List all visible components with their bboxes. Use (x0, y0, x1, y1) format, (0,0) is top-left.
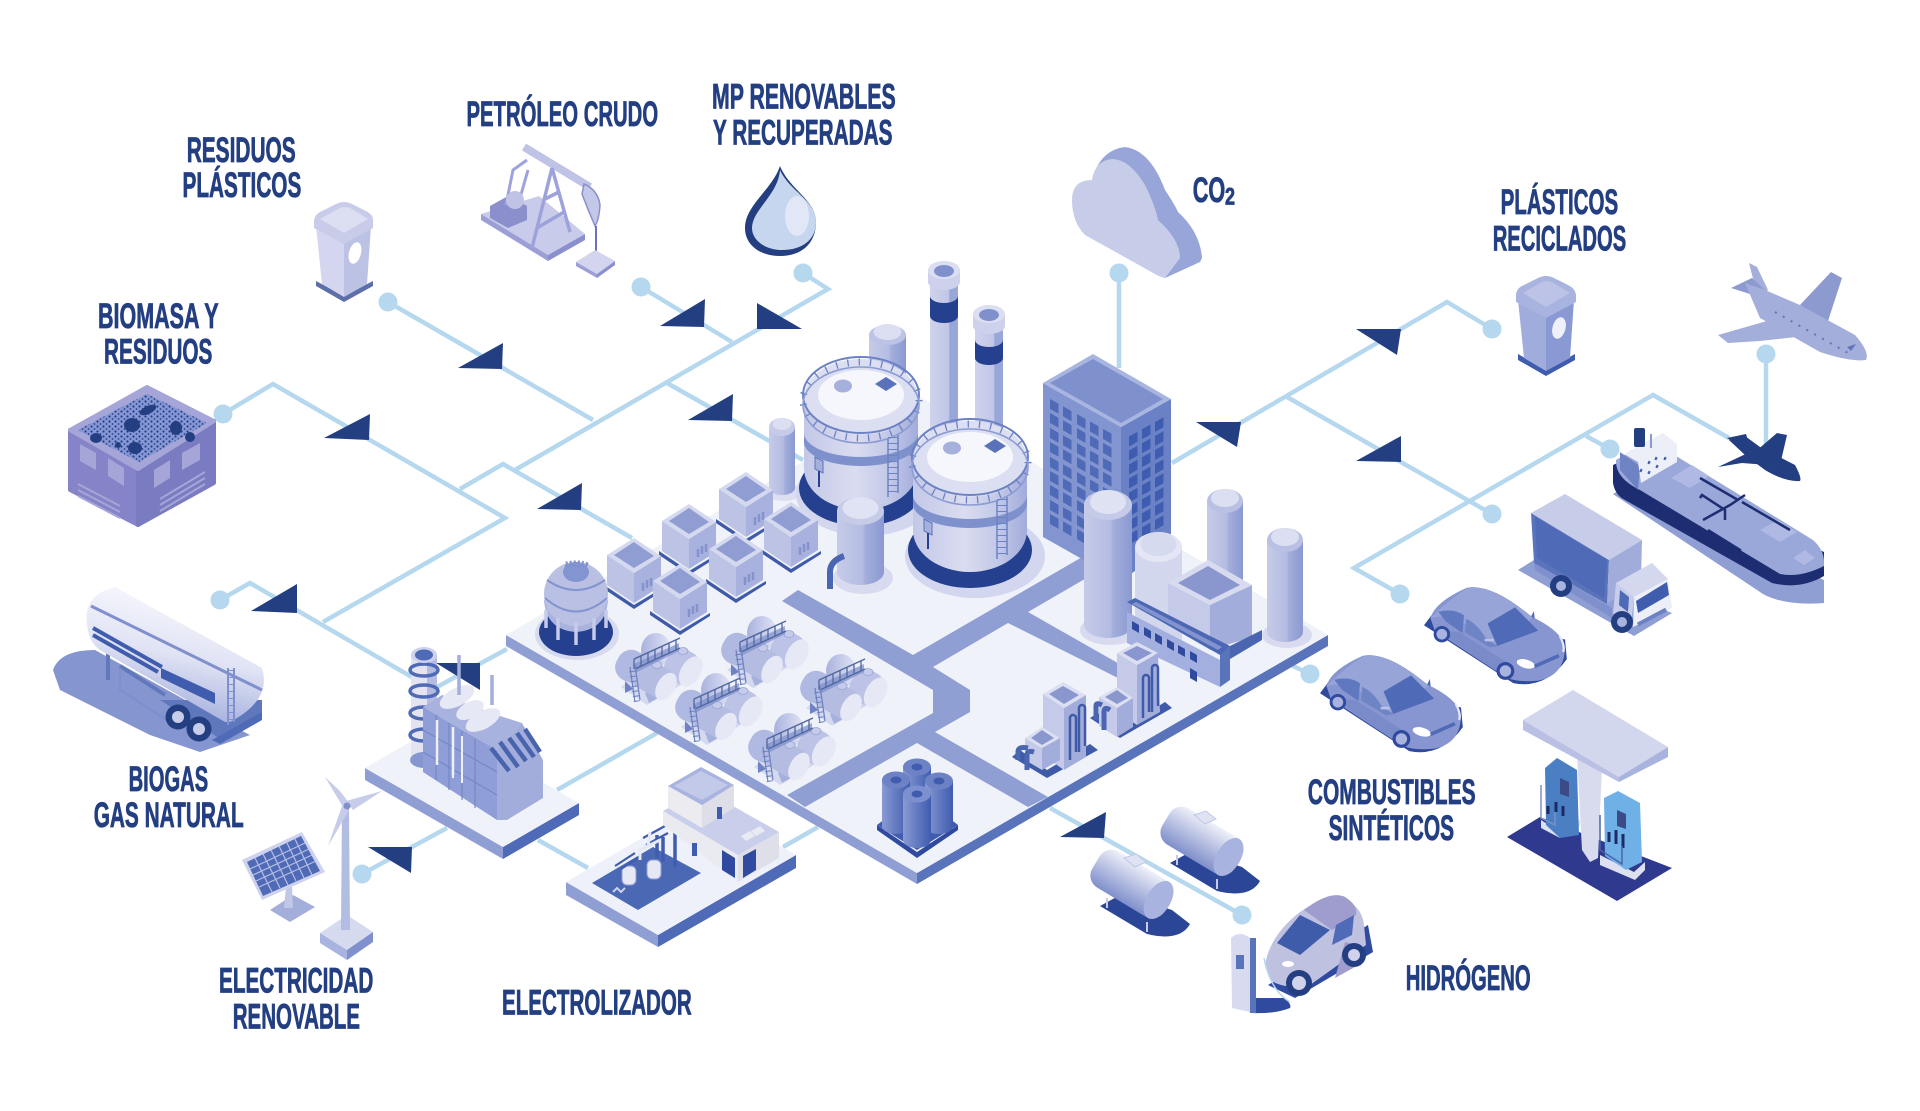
canopy pillar (1577, 755, 1602, 862)
box truck (1518, 494, 1672, 636)
pump jack (481, 147, 615, 278)
back cylinder (869, 324, 906, 385)
label: plásticos reciclados: RECICLADOS (1493, 220, 1626, 258)
connector end dots (210, 264, 1776, 924)
water drop (745, 166, 816, 256)
trash bin: plastic waste (314, 202, 373, 302)
label: MP renovables (712, 78, 896, 152)
flow arrows (251, 299, 1401, 873)
label: electrolizador: ELECTROLIZADOR (502, 984, 692, 1023)
hydrogen storage tank, rear (1155, 801, 1260, 893)
large storage tank 1 (796, 357, 936, 536)
spherical gas tank (535, 562, 619, 660)
label: biomasa y residuos (98, 297, 219, 372)
plant block (423, 655, 543, 820)
electrolyzer equipment (613, 826, 675, 892)
internal roads (782, 527, 1140, 807)
oil tanker ship (1613, 428, 1824, 604)
label: CO2: CO (1193, 171, 1225, 210)
label: combustibles sintéticos (1308, 773, 1476, 848)
label: MP renovables: MP RENOVABLES (712, 78, 896, 117)
label: hidrógeno: HIDRÓGENO (1406, 958, 1531, 998)
power island platform and plant (365, 647, 579, 859)
trash bin: recycled plastics (1516, 276, 1576, 376)
CO2 cloud (1072, 147, 1202, 278)
connector lines (220, 273, 1766, 915)
label: plásticos reciclados (1493, 182, 1626, 258)
electrolyzer island (566, 767, 796, 947)
process unit A (1012, 682, 1098, 778)
smoke stacks (928, 261, 1005, 435)
process boxes (604, 472, 821, 635)
horizontal tank clusters (610, 616, 893, 785)
airplane, dark (1718, 433, 1800, 481)
process unit B (1090, 642, 1172, 738)
main refinery platform (506, 395, 1328, 884)
label: biogas gas natural: BIOGAS (129, 760, 208, 799)
office building (1043, 354, 1171, 581)
left pump (1541, 758, 1580, 838)
canopy roof (1523, 690, 1668, 782)
right pump (1600, 791, 1645, 880)
hydrogen storage tank, front (1085, 844, 1190, 936)
label: combustibles sintéticos: COMBUSTIBLES (1308, 773, 1476, 812)
lower building (663, 767, 779, 882)
label: residuos plásticos (182, 131, 301, 205)
label: CO2: 2 (1225, 184, 1235, 211)
label: petróleo crudo: PETRÓLEO CRUDO (466, 94, 658, 134)
hydrogen electric car (1264, 895, 1373, 1002)
fuel station (1507, 690, 1672, 901)
right cylinders (1080, 489, 1312, 648)
label: biogas gas natural (94, 760, 244, 835)
small process building and hall (1127, 560, 1262, 687)
label: biogas gas natural: GAS NATURAL (94, 796, 244, 835)
label: biomasa y residuos: RESIDUOS (104, 333, 212, 372)
passenger car, front (1320, 655, 1463, 752)
airplane, light (1718, 263, 1867, 360)
front medium cylinder with pipe (830, 497, 893, 594)
hydrogen charging point (1231, 934, 1290, 1013)
solar panel (242, 832, 325, 922)
biomass crate (70, 387, 214, 525)
wind turbine (320, 777, 382, 960)
passenger car, rear (1424, 587, 1567, 684)
gas tanker truck (53, 587, 264, 752)
label: plásticos reciclados: PLÁSTICOS (1501, 182, 1618, 222)
column tower (410, 647, 438, 768)
label: electricidad renovable (219, 962, 373, 1037)
label: MP renovables: Y RECUPERADAS (713, 114, 892, 152)
label: electricidad renovable: RENOVABLE (233, 998, 360, 1037)
label: biomasa y residuos: BIOMASA Y (98, 297, 219, 336)
label: residuos plásticos: RESIDUOS (187, 131, 296, 170)
thin cylinder (766, 418, 802, 501)
label: combustibles sintéticos: SINTÉTICOS (1329, 808, 1454, 848)
bottom cylinder group (877, 758, 958, 858)
label: electricidad renovable: ELECTRICIDAD (219, 962, 373, 1001)
label: residuos plásticos: PLÁSTICOS (182, 165, 301, 205)
large storage tank 2 (905, 419, 1045, 598)
